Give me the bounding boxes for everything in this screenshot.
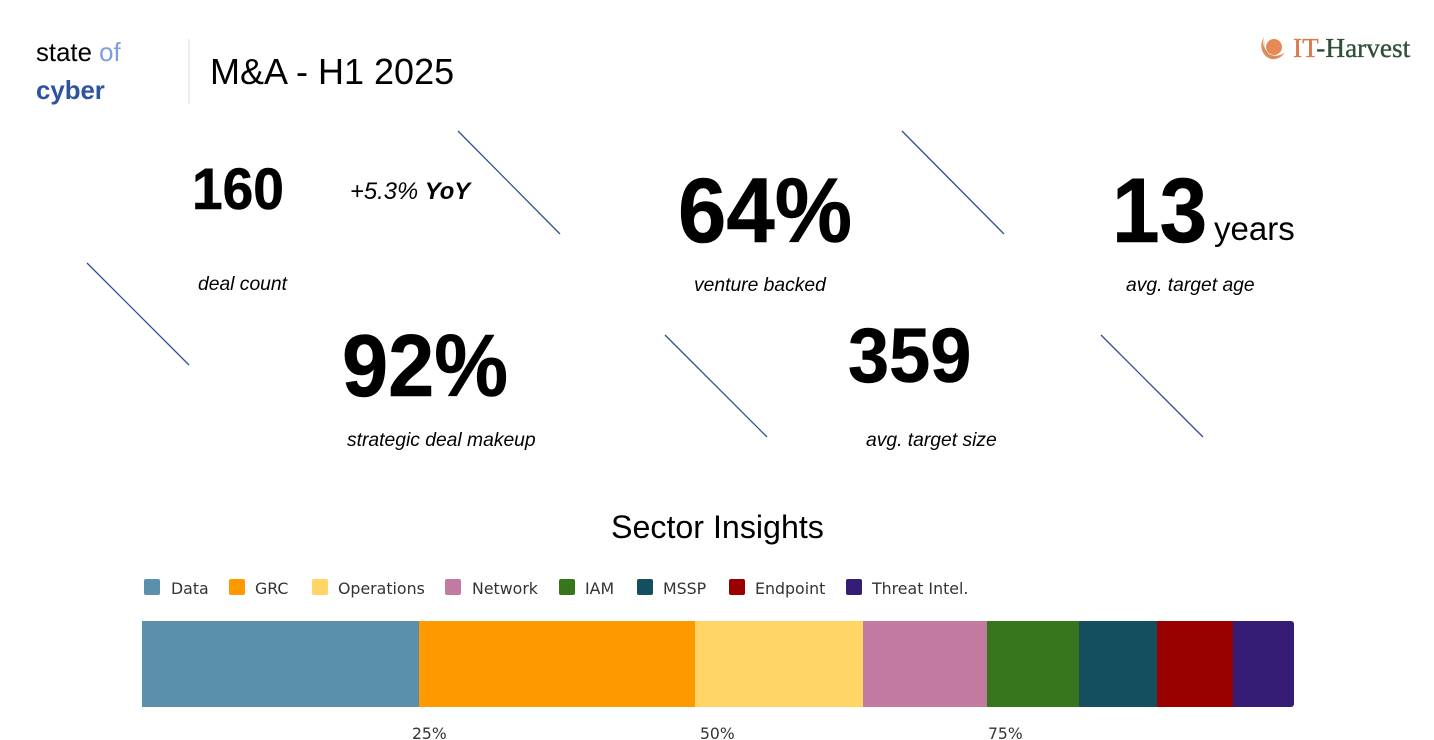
brand: state of cyber bbox=[36, 39, 121, 105]
legend: IAM bbox=[585, 579, 614, 598]
logo text: IT-Harvest bbox=[1293, 33, 1410, 63]
legend: Data bbox=[171, 579, 209, 598]
stat: strategic deal makeup bbox=[342, 316, 536, 451]
caption: avg. target size bbox=[866, 430, 997, 451]
heading: sector insights: Sector Insights bbox=[611, 509, 824, 545]
stat: venture backed bbox=[678, 160, 852, 296]
value: 359 bbox=[848, 313, 971, 399]
stat: avg target size bbox=[848, 313, 997, 451]
brand: state of cyber: state of bbox=[36, 39, 121, 67]
axis labels bbox=[412, 725, 1023, 740]
stat: avg target age bbox=[1112, 160, 1295, 296]
legend: GRC bbox=[255, 579, 288, 598]
value: 64% bbox=[678, 160, 852, 262]
unit: years bbox=[1214, 210, 1295, 247]
legend: Network bbox=[472, 579, 538, 598]
legend bbox=[144, 579, 968, 598]
icon: logo swirl bbox=[1261, 37, 1285, 60]
stacked bar chart bbox=[142, 621, 1294, 707]
caption: strategic deal makeup bbox=[347, 430, 536, 451]
header divider bbox=[188, 39, 190, 104]
caption: venture backed bbox=[694, 275, 826, 296]
legend: Operations bbox=[338, 579, 425, 598]
value: 160 bbox=[192, 157, 284, 222]
title: M&A - H1 2025 bbox=[210, 51, 454, 92]
caption: avg. target age bbox=[1126, 275, 1255, 296]
logo: IT-Harvest bbox=[1261, 33, 1410, 63]
caption: deal count bbox=[198, 274, 287, 295]
yoy: +5.3% YoY bbox=[350, 178, 470, 205]
legend: Threat Intel. bbox=[872, 579, 968, 598]
value: 13 bbox=[1112, 160, 1207, 262]
brand: state of cyber: cyber bbox=[36, 77, 105, 105]
stat: deal count bbox=[192, 157, 472, 295]
legend: MSSP bbox=[663, 579, 706, 598]
value: 92% bbox=[342, 316, 508, 415]
legend: Endpoint bbox=[755, 579, 825, 598]
